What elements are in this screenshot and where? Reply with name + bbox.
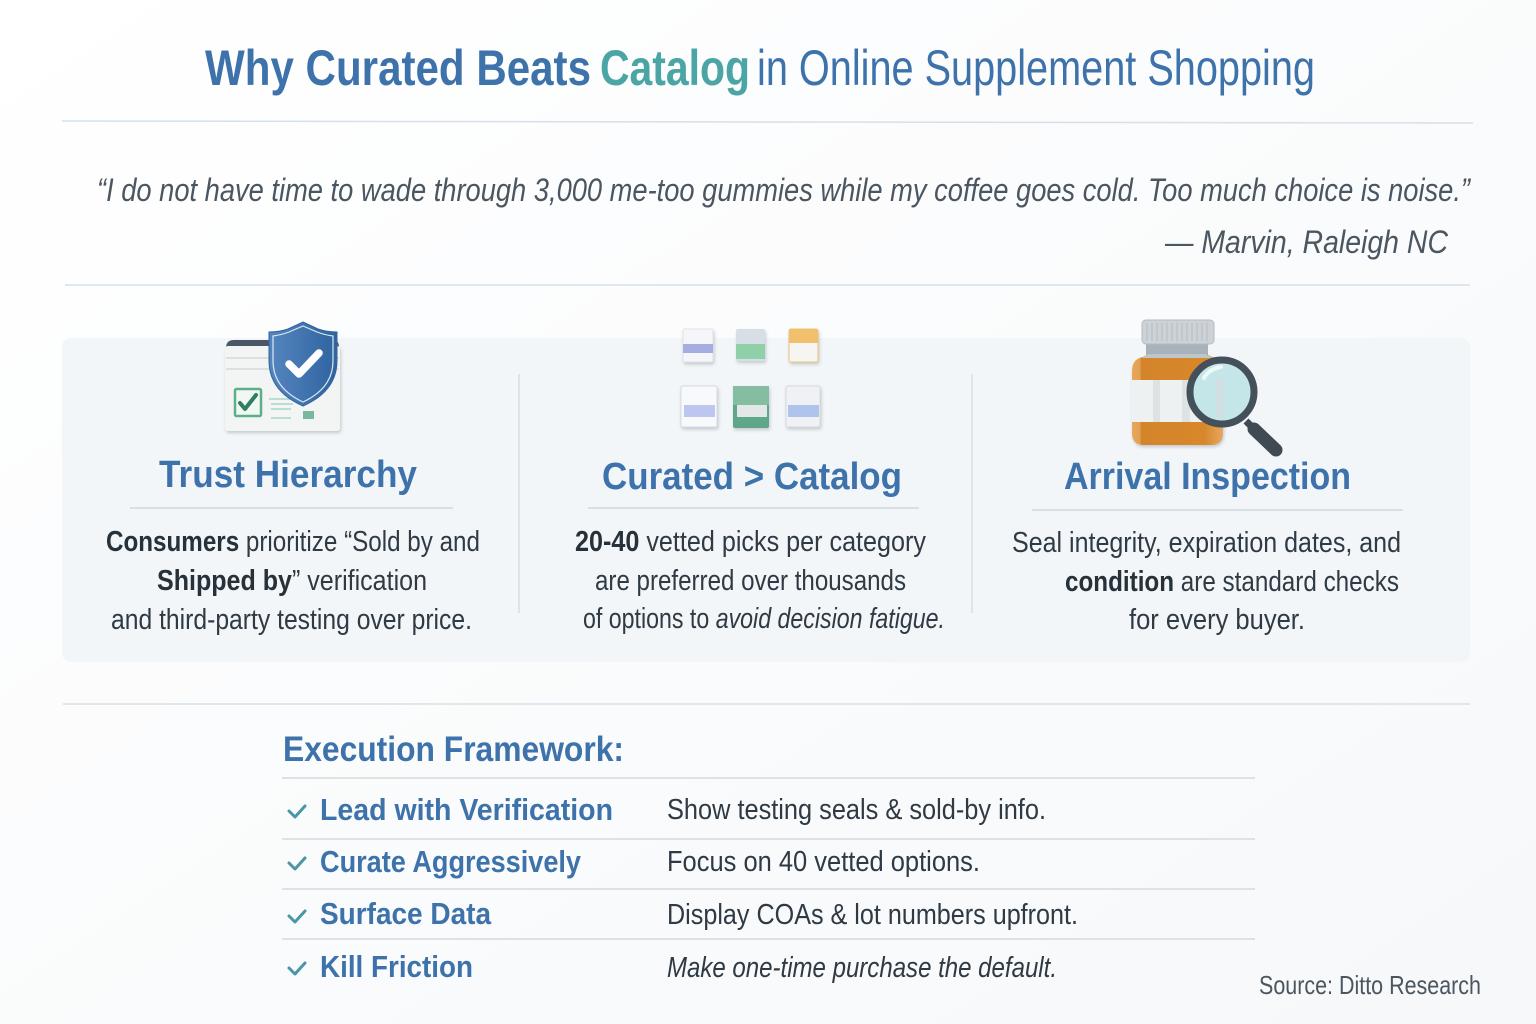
row: lead with verification [289,792,1046,827]
row: kill friction: Make one-time purchase the default. [667,952,1057,984]
column: arrival inspection [1012,456,1403,636]
column: curated vs catalog: 20-40 vetted picks per category [575,526,926,558]
row: curate aggressively: Focus on 40 vetted options. [667,846,980,878]
column: arrival inspection: condition are standard checks [1065,566,1399,598]
column: arrival inspection: Seal integrity, expiration dates, and [1012,527,1401,559]
icon: shield over document [225,322,340,431]
panel: execution framework [282,730,1255,984]
column: arrival inspection: for every buyer. [1129,604,1305,636]
column: trust hierarchy: Trust Hierarchy [159,454,417,496]
column: curated vs catalog: of options to avoid decision fatigue. [583,603,945,635]
column: curated vs catalog [575,456,945,635]
title: Why Curated Beats [205,40,591,96]
column: curated vs catalog: Curated > Catalog [602,456,902,498]
column: trust hierarchy: Consumers prioritize “Sold by and [106,526,480,558]
heading: execution framework: Execution Framework: [283,730,624,769]
column: trust hierarchy [106,454,480,636]
title: in Online Supplement Shopping [757,40,1315,96]
title: Catalog [600,40,750,96]
column: trust hierarchy: Shipped by” verification [157,565,427,597]
row: kill friction: Kill Friction [320,949,473,984]
panel: three insights [62,320,1470,662]
row: surface data: Display COAs & lot numbers upfront. [667,899,1078,931]
quote [97,172,1471,260]
quote: — Marvin, Raleigh NC [1164,224,1449,260]
row: surface data: Surface Data [320,896,492,931]
source note: Source: Ditto Research [1259,970,1481,1000]
column: trust hierarchy: and third-party testing over price. [111,604,472,636]
title [205,40,1315,96]
row: curate aggressively: Curate Aggressively [320,844,582,879]
row: lead with verification: Show testing seals & sold-by info. [667,794,1046,826]
column: curated vs catalog: are preferred over thousands [595,565,906,597]
icon: curated product grid [681,329,820,428]
row: lead with verification: Lead with Verification [320,792,613,827]
row: curate aggressively [289,844,980,879]
row: kill friction [289,949,1057,984]
icon: supplement bottle with magnifier [1132,320,1276,450]
column: arrival inspection: Arrival Inspection [1064,456,1351,498]
row: surface data [289,896,1078,931]
